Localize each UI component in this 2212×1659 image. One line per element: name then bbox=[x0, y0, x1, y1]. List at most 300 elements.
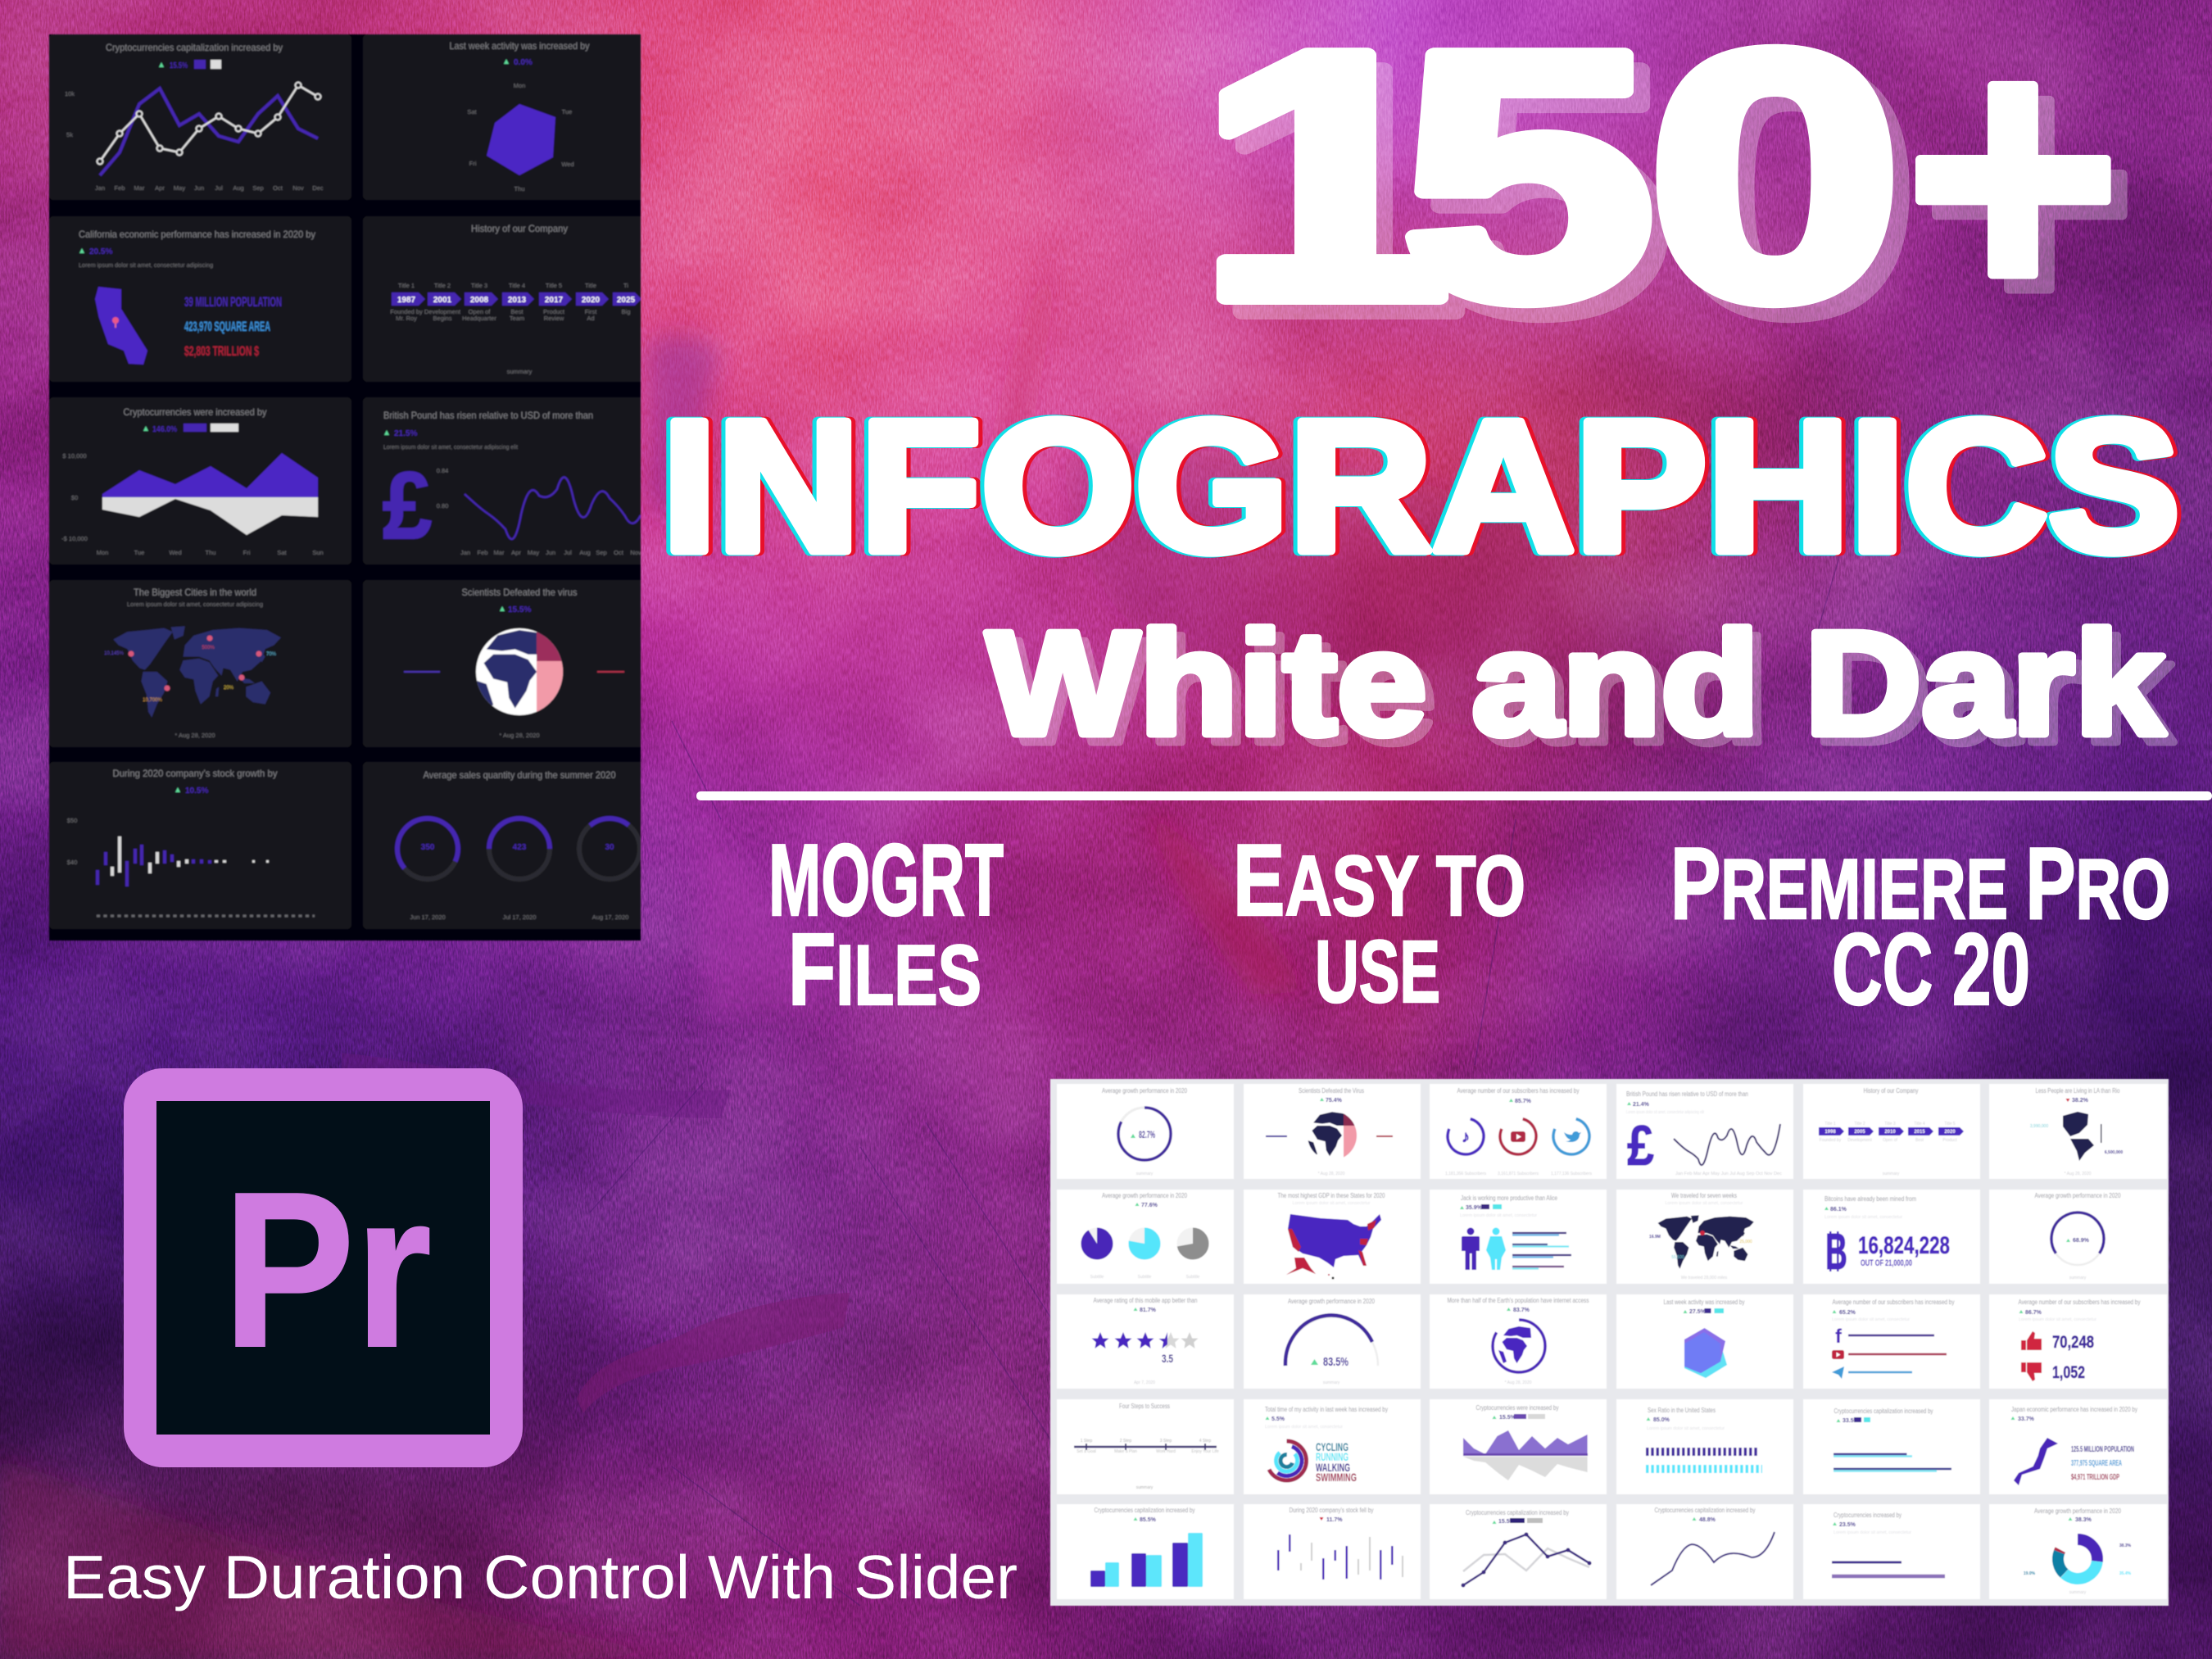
light card: bitcoins mined: OUT OF 21,000,00 bbox=[1861, 1258, 1912, 1268]
dark card: British Pound wave chart: 0.84 bbox=[437, 467, 448, 474]
dark card: average sales quantity rings: Jun 17, 2020 bbox=[410, 913, 446, 921]
light card: capitalization bars bbox=[1803, 1399, 1980, 1494]
light card: activity rings with legend: WALKING bbox=[1316, 1461, 1350, 1474]
light card: cryptocurrency area chart: Cryptocurrencies were increased by bbox=[1476, 1404, 1558, 1412]
light card: company history: 1998 bbox=[1824, 1130, 1836, 1135]
light card: single curve chart: Cryptocurrencies capitalization increased by bbox=[1655, 1507, 1755, 1514]
dark card: British Pound wave chart: £ bbox=[383, 452, 432, 559]
dark card: biggest cities world map: 10,700% bbox=[143, 698, 163, 703]
dark card: company history timeline: First bbox=[585, 308, 597, 315]
light card: semi-circular gauge: 83.5% bbox=[1323, 1355, 1349, 1369]
dark card: cryptocurrencies line chart: Oct bbox=[273, 184, 283, 192]
dark card: company history timeline: 2017 bbox=[545, 296, 564, 305]
light card: bitcoins mined: B bbox=[1825, 1224, 1847, 1281]
dark card: average sales quantity rings: Aug 17, 2020 bbox=[592, 913, 628, 921]
light card: four steps timeline bbox=[1057, 1399, 1234, 1494]
dark card: cryptocurrencies line chart: 15.5% bbox=[170, 61, 188, 70]
dark card: cryptocurrencies area chart: Mon bbox=[97, 549, 108, 556]
light card: candlestick chart: 11.7% bbox=[1326, 1517, 1343, 1523]
dark card: company history timeline: Best bbox=[510, 308, 524, 315]
light card: three pie charts: Subtitle bbox=[1090, 1275, 1104, 1280]
light card: thumbs up and down: Lorem ipsum dolor sit amet, consectetur bbox=[2019, 1317, 2096, 1322]
dark card: company history timeline bbox=[363, 216, 646, 382]
light card: activity rings with legend: 5.5% bbox=[1271, 1416, 1285, 1422]
light card: social subscribers bars: Lorem ipsum dolor sit amet, consectetur bbox=[1832, 1317, 1910, 1322]
dark card: company history timeline: 1987 bbox=[397, 296, 416, 305]
dark card: average sales quantity rings: 30 bbox=[605, 843, 614, 852]
light card: thumbs up and down: 1,052 bbox=[2052, 1363, 2085, 1382]
light card: star rating: Apr 7, 2020 bbox=[1134, 1380, 1155, 1385]
light card: highest GDP states map: The most highest GDP in these States for 2020 bbox=[1278, 1192, 1385, 1199]
dark card: scientists defeated the virus globe: 15.5% bbox=[508, 605, 531, 614]
dark card: scientists defeated the virus globe: * Aug 28, 2020 bbox=[499, 732, 540, 739]
dark card: cryptocurrencies area chart bbox=[49, 397, 351, 564]
light card: internet access globe: 83.7% bbox=[1513, 1308, 1530, 1313]
light card: average growth ring: 82.7% bbox=[1139, 1129, 1155, 1140]
light card: traveled world map: We traveled 28,000 miles bbox=[1681, 1276, 1728, 1281]
light card: three pie charts: 77.6% bbox=[1141, 1203, 1158, 1208]
dark card: biggest cities world map: 500% bbox=[202, 646, 215, 650]
light card: capitalization two bars: Lorem ipsum dolor sit amet, consectetur bbox=[1834, 1530, 1911, 1535]
light card: average growth ring bbox=[1057, 1084, 1234, 1179]
dark card: weekly activity radar: Last week activity was increased by bbox=[449, 40, 590, 52]
heading: INFOGRAPHICS with red and cyan offset: INFOGRAPHICS bbox=[665, 383, 2183, 591]
light card: donut chart: 19.0% bbox=[2024, 1571, 2036, 1576]
dark card: British Pound wave chart: Jan bbox=[460, 549, 470, 556]
dark card: cryptocurrencies area chart: Wed bbox=[169, 549, 182, 556]
dark card: cryptocurrencies area chart: Thu bbox=[206, 549, 215, 556]
dark card: biggest cities world map: Lorem ipsum dolor sit amet, consectetur adipiscing bbox=[127, 601, 263, 608]
heading: INFOGRAPHICS with red and cyan offset: INFOGRAPHICS bbox=[662, 383, 2180, 591]
dark card: cryptocurrencies line chart: May bbox=[174, 184, 185, 192]
dark card: cryptocurrencies line chart: Jun bbox=[194, 184, 204, 192]
light card: scientists defeated the virus bbox=[1244, 1084, 1421, 1179]
dark card: company history timeline: Founded by bbox=[390, 308, 423, 315]
dark card: cryptocurrencies area chart: Tue bbox=[134, 549, 144, 556]
dark card: company history timeline: 2020 bbox=[582, 296, 601, 305]
dark card: British Pound wave chart: Feb bbox=[478, 549, 487, 556]
light card: company history: 2015 bbox=[1914, 1130, 1925, 1135]
dark card: scientists defeated the virus globe: Scientists Defeated the virus bbox=[462, 587, 577, 598]
dark card: British Pound wave chart: Sep bbox=[596, 549, 607, 556]
light card: internet access globe bbox=[1430, 1294, 1607, 1389]
light card: company history: Open of bbox=[1883, 1138, 1898, 1143]
dark card: average sales quantity rings: Jul 17, 2020 bbox=[503, 913, 536, 921]
light card: thumbs up and down bbox=[1989, 1294, 2167, 1389]
light card: subscribers social rings: 1,177,136 Subscribers bbox=[1551, 1172, 1593, 1176]
light card: company history: Title 1 bbox=[1824, 1122, 1836, 1126]
light card: internet access globe: More than half of the Earth's population have internet access bbox=[1447, 1297, 1589, 1304]
light card: less people living in LA: 6,500,000 bbox=[2105, 1150, 2123, 1155]
light card: growth ring 68.9 percent: summary bbox=[2069, 1276, 2087, 1281]
light card: cryptocurrency area chart: 15.5% bbox=[1499, 1415, 1516, 1421]
dark card: weekly activity radar: Fri bbox=[469, 160, 477, 167]
light card: subscribers social rings: 3,161,871 Subscribers bbox=[1498, 1172, 1539, 1176]
dark card: company history timeline: Title 5 bbox=[546, 282, 562, 289]
dark card: company stock candlesticks: During 2020 company's stock growth by bbox=[113, 768, 277, 779]
light card: subscribers social rings: ♪ bbox=[1462, 1128, 1470, 1146]
dark card: cryptocurrencies line chart: Jan bbox=[95, 184, 105, 192]
light card: company history: 2020 bbox=[1944, 1130, 1956, 1135]
light card: British Pound wave: British Pound has risen relative to USD of more than bbox=[1626, 1090, 1748, 1098]
light card: subscribers social rings: 85.7% bbox=[1515, 1099, 1532, 1104]
dark card: British Pound wave chart: May bbox=[528, 549, 539, 556]
light card: activity rings with legend: Lorem ipsum dolor sit amet, consectetur bbox=[1265, 1425, 1343, 1430]
light card: semi-circular gauge bbox=[1244, 1294, 1421, 1389]
light card: two line chart: Cryptocurrencies capitalization increased by bbox=[1466, 1509, 1569, 1516]
dark card: company stock candlesticks bbox=[49, 762, 351, 929]
light card: semi-circular gauge: summary bbox=[1323, 1380, 1340, 1385]
light card: traveled world map: 25,000 bbox=[1739, 1240, 1752, 1244]
light card: sex ratio pictograms: Sex Ratio in the United States bbox=[1648, 1407, 1716, 1414]
light card: sex ratio pictograms: Lorem ipsum dolor sit amet, consectetur bbox=[1647, 1426, 1725, 1431]
light card: sex ratio pictograms: 85.0% bbox=[1653, 1417, 1670, 1423]
light card: scientists defeated the virus: * Aug 28, 2020 bbox=[1318, 1172, 1345, 1176]
light card: growth ring 68.9 percent: Average growth performance in 2020 bbox=[2035, 1192, 2121, 1199]
icon: Adobe Premiere Pro logo: Pr bbox=[223, 1147, 432, 1394]
light card: two line chart: 15.5% bbox=[1498, 1519, 1516, 1525]
dark card: company history timeline: Title 2 bbox=[434, 282, 451, 289]
panel: dark infographics contact sheet bbox=[49, 34, 652, 941]
dark card: cryptocurrencies line chart: Cryptocurrencies capitalization increased by bbox=[106, 42, 283, 53]
light card: traveled world map bbox=[1616, 1190, 1793, 1284]
dark card: cryptocurrencies line chart: 10k bbox=[65, 90, 75, 97]
light card: activity radar: 27.5% bbox=[1689, 1309, 1707, 1315]
dark card: cryptocurrencies area chart: Sat bbox=[277, 549, 288, 556]
dark card: cryptocurrencies area chart: Cryptocurrencies were increased by bbox=[123, 406, 267, 418]
light card: capitalization two bars: Cryptocurrencies increased by bbox=[1834, 1512, 1902, 1519]
dark card: weekly activity radar: 0.0% bbox=[514, 58, 533, 67]
light card: capitalization two bars bbox=[1803, 1504, 1980, 1599]
light card: average growth ring: Average growth performance in 2020 bbox=[1102, 1087, 1187, 1095]
dark card: biggest cities world map: * Aug 28, 2020 bbox=[175, 732, 215, 739]
dark card: company history timeline: Development bbox=[424, 308, 461, 315]
dark card: company history timeline: Open of bbox=[469, 308, 491, 315]
light card: three pie charts bbox=[1057, 1190, 1234, 1284]
light card: four steps timeline: Enjoy Your Life bbox=[1191, 1449, 1219, 1454]
dark card: cryptocurrencies area chart: Sun bbox=[312, 549, 324, 556]
dark card: company history timeline: History of our Company bbox=[471, 223, 568, 234]
dark card: biggest cities world map: 10,145% bbox=[104, 651, 125, 656]
light card: subscribers social rings: 1,181,356 Subscribers bbox=[1445, 1172, 1487, 1176]
light card: thumbs up and down: Average number of our subscribers has increased by bbox=[2019, 1299, 2140, 1306]
light card: semi-circular gauge: Average growth performance in 2020 bbox=[1288, 1298, 1375, 1305]
light card: star rating: 81.7% bbox=[1140, 1308, 1157, 1313]
light card: Jack and Alice pictogram bars: 35.9% bbox=[1466, 1205, 1483, 1211]
feature: Premiere Pro CC 20: CC 20 bbox=[1832, 913, 2030, 1027]
light card: donut chart: 35.4% bbox=[2119, 1571, 2132, 1576]
dark card: company history timeline: summary bbox=[507, 368, 533, 375]
caption: easy duration control: Easy Duration Control With Slider bbox=[63, 1543, 1018, 1611]
feature: MOGRT Files: FILES bbox=[788, 913, 981, 1027]
light card: social subscribers bars: 65.2% bbox=[1839, 1310, 1856, 1316]
dark card: company history timeline: Big bbox=[622, 308, 630, 315]
dark card: cryptocurrencies line chart: Sep bbox=[252, 184, 264, 192]
light card: growth ring 68.9 percent: 68.9% bbox=[2073, 1238, 2090, 1244]
light card: Japan performance: Japan economic performance has increased in 2020 by bbox=[2011, 1406, 2137, 1413]
light card: activity rings with legend: Total time of my activity in last week has increased by bbox=[1265, 1406, 1388, 1413]
dark card: average sales quantity rings: 423 bbox=[513, 843, 527, 852]
dark card: British Pound wave chart: 21.5% bbox=[394, 429, 417, 438]
light card: social subscribers bars: Average number of our subscribers has increased by bbox=[1832, 1299, 1955, 1306]
dark card: average sales quantity rings: Average sales quantity during the summer 2020 bbox=[423, 769, 616, 781]
dark card: British Pound wave chart: Jul bbox=[564, 549, 572, 556]
feature: Easy to use bbox=[1233, 824, 1525, 1021]
feature: Premiere Pro CC 20 bbox=[1670, 827, 2170, 1027]
dark card: British Pound wave chart: Oct bbox=[614, 549, 624, 556]
dark card: California economic performance: California economic performance has increased in 2020 by bbox=[79, 229, 315, 240]
dark card: cryptocurrencies line chart: Mar bbox=[134, 184, 145, 192]
light card: company history: Founded by bbox=[1820, 1138, 1842, 1143]
feature: Premiere Pro CC 20: PREMIERE PRO bbox=[1670, 827, 2170, 941]
dark card: company history timeline: Mr. Roy bbox=[396, 315, 417, 322]
dark card: cryptocurrencies area chart: 146.0% bbox=[152, 425, 177, 434]
light card: activity rings with legend: CYCLING bbox=[1316, 1440, 1349, 1453]
dark card: cryptocurrencies area chart: -$ 10,000 bbox=[61, 535, 88, 542]
light card: donut chart: summary bbox=[2069, 1590, 2087, 1595]
dark card: biggest cities world map: 20% bbox=[224, 686, 234, 691]
light card: single curve chart bbox=[1616, 1504, 1793, 1599]
dark card: company stock candlesticks: $40 bbox=[67, 859, 77, 866]
light card: sex ratio pictograms bbox=[1616, 1399, 1793, 1494]
light card: four steps timeline: 1 Step bbox=[1081, 1439, 1092, 1444]
light card: four steps timeline: Set a Goal bbox=[1077, 1449, 1096, 1454]
light card: Japan performance bbox=[1989, 1399, 2167, 1494]
light card: subscribers social rings bbox=[1430, 1084, 1607, 1179]
light card: candlestick chart: During 2020 company's stock fell by bbox=[1290, 1507, 1373, 1514]
dark card: biggest cities world map: The Biggest Cities in the world bbox=[134, 587, 256, 598]
light card: average growth ring: summary bbox=[1136, 1172, 1154, 1176]
dark card: British Pound wave chart: British Pound has risen relative to USD of more than bbox=[383, 410, 593, 421]
dark card: company history timeline: 2025 bbox=[617, 296, 636, 305]
light card: thumbs up and down: 86.7% bbox=[2025, 1310, 2042, 1316]
light card: Jack and Alice pictogram bars: Jack is working more productive than Alice bbox=[1461, 1194, 1557, 1202]
light card: four steps timeline: 2 Step bbox=[1120, 1439, 1131, 1444]
light card: four steps timeline: 3 Step bbox=[1160, 1439, 1172, 1444]
dark card: company history timeline: Review bbox=[544, 315, 564, 322]
light card: three pie charts: Average growth performance in 2020 bbox=[1102, 1192, 1187, 1199]
dark card: cryptocurrencies area chart: Fri bbox=[243, 549, 251, 556]
dark card: weekly activity radar: Tue bbox=[562, 108, 572, 116]
light card: company history: Product bbox=[1942, 1138, 1957, 1143]
dark card: average sales quantity rings: 350 bbox=[421, 843, 435, 852]
light card: four steps timeline: Work Hard bbox=[1156, 1449, 1176, 1454]
light card: less people living in LA: 3,990,000 bbox=[2030, 1124, 2048, 1129]
light card: Japan performance: $4,971 TRILLION GDP bbox=[2071, 1473, 2119, 1482]
dark card: weekly activity radar: Wed bbox=[561, 161, 574, 168]
dark card: biggest cities world map bbox=[49, 580, 351, 747]
light card: traveled world map: We traveled for seven weeks bbox=[1671, 1192, 1737, 1199]
light card: star rating bbox=[1057, 1294, 1234, 1389]
dark card: average sales quantity rings bbox=[363, 762, 652, 929]
dark card: California economic performance bbox=[49, 216, 351, 382]
dark card: weekly activity radar: Sat bbox=[467, 108, 478, 116]
light card: internet access globe: * Aug 28, 2020 bbox=[1505, 1380, 1532, 1385]
light card: thumbs up and down: 70,248 bbox=[2052, 1333, 2094, 1352]
light card: highest GDP states map bbox=[1244, 1190, 1421, 1284]
dark card: British Pound wave chart: Mar bbox=[494, 549, 505, 556]
light card: company history: Best bbox=[1915, 1138, 1924, 1143]
dark card: company history timeline: Product bbox=[543, 308, 565, 315]
light card: company history: 2010 bbox=[1884, 1130, 1896, 1135]
dark card: company history timeline: Headquarter bbox=[462, 315, 496, 322]
dark card: cryptocurrencies area chart: $ 10,000 bbox=[62, 452, 87, 460]
dark card: California economic performance: 423,970 SQUARE AREA bbox=[184, 319, 270, 334]
heading: White and Dark: White and Dark bbox=[995, 610, 2174, 774]
main heading: 150+: 150 bbox=[1213, 0, 1919, 387]
dark card: cryptocurrencies line chart: Aug bbox=[233, 184, 244, 192]
light card: company history: Title 5 bbox=[1944, 1122, 1956, 1126]
light card: company history: 2005 bbox=[1854, 1130, 1865, 1135]
light card: growth ring 68.9 percent bbox=[1989, 1190, 2167, 1284]
dark card: company history timeline: Title bbox=[585, 282, 596, 289]
light card: bitcoins mined bbox=[1803, 1190, 1980, 1284]
dark card: cryptocurrencies line chart bbox=[49, 34, 351, 200]
light card: star rating: 3.5 bbox=[1162, 1352, 1173, 1365]
light card: cryptocurrency area chart bbox=[1430, 1399, 1607, 1494]
light card: less people living in LA: Less People are Living in LA than Rio bbox=[2035, 1087, 2120, 1095]
light card: company history: History of our Company bbox=[1863, 1087, 1919, 1095]
dark card: weekly activity radar: Mon bbox=[514, 82, 525, 89]
feature: Easy to use: EASY TO bbox=[1233, 824, 1525, 937]
dark card: cryptocurrencies line chart: Dec bbox=[312, 184, 324, 192]
light card: four steps timeline: summary bbox=[1136, 1485, 1154, 1490]
dark card: British Pound wave chart: Aug bbox=[579, 549, 591, 556]
light card: less people living in LA: 38.2% bbox=[2072, 1098, 2089, 1104]
light card: highest GDP states map: Lorem ipsum dolor sit amet, consectetur bbox=[1293, 1201, 1371, 1206]
dark card: cryptocurrencies line chart: Feb bbox=[115, 184, 125, 192]
light card: four steps timeline: Make a Plan bbox=[1114, 1449, 1137, 1454]
light card: company history: Title 4 bbox=[1914, 1122, 1925, 1126]
light card: Jack and Alice pictogram bars: Lorem ipsum dolor sit amet, consectetur bbox=[1460, 1213, 1537, 1218]
dark card: British Pound wave chart: Jun bbox=[546, 549, 555, 556]
light card: capitalization two bars: 23.5% bbox=[1839, 1522, 1856, 1528]
dark card: British Pound wave chart: Nov bbox=[630, 549, 641, 556]
dark card: weekly activity radar bbox=[363, 34, 646, 200]
dark card: cryptocurrencies line chart: Nov bbox=[292, 184, 304, 192]
light card: capitalization bars: Cryptocurrencies capitalization increased by bbox=[1834, 1407, 1933, 1415]
light card: single curve chart: 48.8% bbox=[1699, 1517, 1716, 1523]
panel: white infographics contact sheet bbox=[1050, 1079, 2169, 1606]
light card: traveled world map: Lorem ipsum dolor sit amet, consectetur bbox=[1665, 1201, 1743, 1206]
light card: scientists defeated the virus: 75.4% bbox=[1326, 1098, 1343, 1104]
light card: three pie charts: Subtitle bbox=[1186, 1275, 1200, 1280]
light card: star rating: Average rating of this mobile app better than bbox=[1093, 1297, 1198, 1304]
heading: White and Dark: White and Dark bbox=[986, 601, 2165, 766]
light card: social subscribers bars: f bbox=[1835, 1326, 1843, 1348]
light card: social subscribers bars bbox=[1803, 1294, 1980, 1389]
feature: Easy to use: USE bbox=[1315, 922, 1440, 1021]
light card: company history: summary bbox=[1883, 1172, 1900, 1176]
light card: grouped bar chart: 85.5% bbox=[1140, 1517, 1157, 1523]
light card: two line chart bbox=[1430, 1504, 1607, 1599]
light card: British Pound wave: £ bbox=[1627, 1113, 1654, 1177]
dark card: company history timeline: Team bbox=[510, 315, 524, 322]
dark card: company stock candlesticks: 10.5% bbox=[185, 786, 208, 796]
dark card: company history timeline: 2013 bbox=[508, 296, 527, 305]
dark card: British Pound wave chart: Apr bbox=[511, 549, 521, 556]
light card: Japan performance: 125.5 MILLION POPULATION bbox=[2071, 1445, 2134, 1454]
light card: company history: Title 2 bbox=[1854, 1122, 1865, 1126]
light card: Jack and Alice pictogram bars bbox=[1430, 1190, 1607, 1284]
light card: company history: Development bbox=[1847, 1138, 1872, 1143]
light card: traveled world map: 55,500 bbox=[1671, 1255, 1684, 1260]
light card: donut chart: 38.3% bbox=[2075, 1517, 2092, 1523]
dark card: British Pound wave chart: 0.80 bbox=[437, 502, 448, 510]
dark card: company history timeline: 2008 bbox=[470, 296, 489, 305]
light card: candlestick chart bbox=[1244, 1504, 1421, 1599]
dark card: California economic performance: 39 MILLION POPULATION bbox=[184, 294, 282, 310]
light card: company history bbox=[1803, 1084, 1980, 1179]
dark card: company history timeline: Title 4 bbox=[509, 282, 525, 289]
dark card: British Pound wave chart bbox=[363, 397, 646, 564]
light card: activity radar bbox=[1616, 1294, 1793, 1389]
light card: four steps timeline: Four Steps to Success bbox=[1119, 1403, 1170, 1410]
light card: company history: Title 3 bbox=[1884, 1122, 1896, 1126]
light card: activity rings with legend: SWIMMING bbox=[1316, 1471, 1357, 1484]
dark card: California economic performance: 20.5% bbox=[89, 247, 112, 256]
light card: bitcoins mined: 16,824,228 bbox=[1858, 1232, 1950, 1259]
dark card: California economic performance: $2,803 TRILLION $ bbox=[184, 343, 259, 359]
dark card: company history timeline: Ad bbox=[587, 315, 595, 322]
light card: donut chart: Average growth performance in 2020 bbox=[2034, 1507, 2121, 1515]
heading: INFOGRAPHICS with red and cyan offset: INFOGRAPHICS bbox=[659, 383, 2177, 591]
light card: bitcoins mined: Bitcoins have already been mined from bbox=[1824, 1195, 1916, 1203]
light card: activity rings with legend: RUNNING bbox=[1316, 1450, 1349, 1463]
light card: subscribers social rings: Average number of our subscribers has increased by bbox=[1457, 1087, 1580, 1095]
light card: activity radar: Last week activity was increased by bbox=[1663, 1299, 1745, 1306]
icon: Adobe Premiere Pro logo bbox=[124, 1068, 523, 1467]
light card: Japan performance: 377,975 SQUARE AREA bbox=[2071, 1459, 2122, 1468]
light card: bitcoins mined: Lorem ipsum dolor sit amet, consectetur bbox=[1824, 1215, 1902, 1220]
dark card: company history timeline: Begins bbox=[433, 315, 452, 322]
light card: Japan performance: 33.7% bbox=[2018, 1416, 2035, 1422]
dark card: company history timeline: Ti bbox=[623, 282, 628, 289]
dark card: scientists defeated the virus globe bbox=[363, 580, 646, 747]
light card: capitalization bars: 33.5% bbox=[1843, 1418, 1860, 1424]
light card: grouped bar chart: Cryptocurrencies capitalization increased by bbox=[1095, 1507, 1194, 1514]
dark card: cryptocurrencies line chart: Jul bbox=[215, 184, 223, 192]
dark card: California economic performance: Lorem ipsum dolor sit amet, consectetur adipiscing bbox=[79, 261, 213, 269]
dark card: company history timeline: Title 1 bbox=[398, 282, 415, 289]
dark card: company stock candlesticks: $50 bbox=[67, 817, 77, 824]
light card: British Pound wave: Lorem ipsum dolor sit amet, consectetur adipiscing elit bbox=[1626, 1110, 1704, 1115]
dark card: company history timeline: Title 3 bbox=[471, 282, 487, 289]
light card: less people living in LA: * Aug 28, 2020 bbox=[2065, 1172, 2092, 1176]
dark card: cryptocurrencies line chart: 5k bbox=[66, 131, 73, 138]
light card: scientists defeated the virus: Scientists Defeated the Virus bbox=[1299, 1087, 1364, 1095]
light card: four steps timeline: 4 Step bbox=[1199, 1439, 1211, 1444]
dark card: cryptocurrencies area chart: $0 bbox=[71, 494, 78, 501]
feature: MOGRT Files bbox=[768, 824, 1004, 1027]
light card: donut chart bbox=[1989, 1504, 2167, 1599]
light card: donut chart: 38.3% bbox=[2119, 1543, 2132, 1548]
light card: activity rings with legend bbox=[1244, 1399, 1421, 1494]
dark card: British Pound wave chart: Lorem ipsum dolor sit amet, consectetur adipiscing elit bbox=[383, 443, 519, 451]
feature: MOGRT Files: MOGRT bbox=[768, 824, 1004, 937]
light card: bitcoins mined: 86.1% bbox=[1830, 1207, 1847, 1213]
light card: less people living in LA bbox=[1989, 1084, 2167, 1179]
light card: British Pound wave: 21.4% bbox=[1633, 1102, 1650, 1108]
light card: traveled world map: 16.9M bbox=[1649, 1235, 1661, 1240]
light card: three pie charts: Subtitle bbox=[1138, 1275, 1152, 1280]
light card: British Pound wave bbox=[1616, 1084, 1793, 1179]
dark card: company history timeline: 2001 bbox=[433, 296, 452, 305]
light card: British Pound wave: Jan Feb Mar Apr May Jun Jul Aug Sep Oct Nov Dec bbox=[1675, 1172, 1783, 1176]
dark card: biggest cities world map: 70% bbox=[266, 652, 277, 657]
dark card: cryptocurrencies line chart: Apr bbox=[155, 184, 165, 192]
light card: grouped bar chart bbox=[1057, 1504, 1234, 1599]
